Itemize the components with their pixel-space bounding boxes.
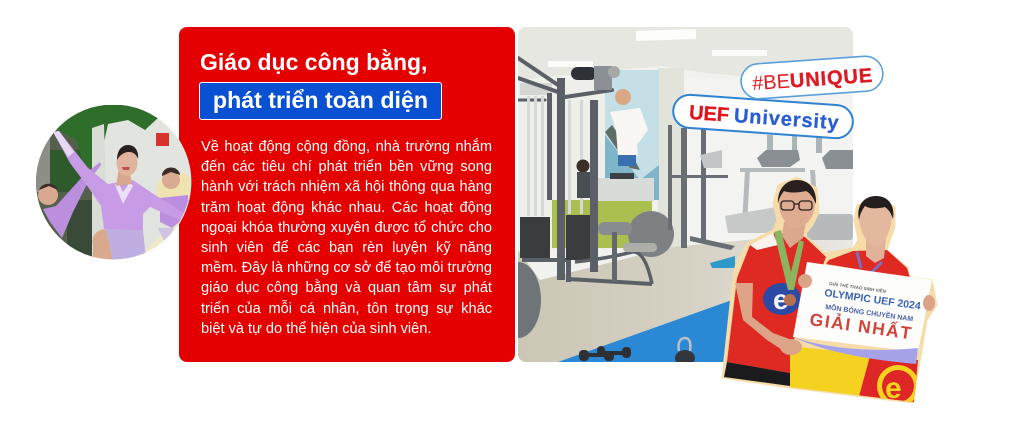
weight stacks: [520, 217, 550, 258]
green wall and reception desk: [552, 200, 652, 248]
left wall and columns: [518, 80, 608, 250]
ball left: [518, 262, 541, 338]
jersey logo: [763, 283, 801, 315]
badge: #BEUNIQUE pill: #BEUNIQUE: [752, 65, 874, 95]
text block: body paragraph: ngoại khóa thường xuyên được tổ chức cho: [201, 220, 492, 236]
medal ribbon and medal: [774, 230, 804, 290]
award sign board: MÔN BÓNG CHUYỀN NAM: [825, 301, 914, 323]
exercise ball rear: [628, 211, 674, 257]
right dancer: [162, 171, 180, 189]
mural with runner: [605, 70, 659, 178]
text block: body paragraph: sinh viên để các bạn rèn luyện kỹ năng: [201, 240, 492, 256]
panel: red text card: [179, 27, 515, 362]
person behind machine: [576, 160, 590, 172]
sticker: volleyball winners cut-out: e: [773, 284, 789, 315]
award sign board: GIẢI NHẤT: [808, 308, 914, 343]
text block: body paragraph: Về hoạt động cộng đồng, nhà trường nhắm: [201, 139, 492, 155]
award sign board: GIẢI THỂ THAO SINH VIÊN: [829, 279, 887, 294]
left player arm: [735, 283, 800, 355]
badge: UEF University pill: [672, 94, 854, 139]
ceiling: [518, 27, 853, 79]
right player neck: [866, 238, 886, 263]
black shorts: [724, 362, 790, 386]
badge: UEF University pill: UEFUniversity: [688, 102, 840, 134]
left player jersey: [727, 233, 826, 373]
text block: body paragraph: biệt và tự do thể hiện của sinh viên.: [201, 321, 431, 337]
right player ribbon: [857, 252, 882, 272]
yellow flag: e: [885, 372, 902, 405]
heading: blue highlighted line: [199, 82, 442, 120]
text block: body paragraph: hành với trách nhiệm xã hội thông qua hàng: [201, 179, 492, 195]
text block: body paragraph: giáo dục công bằng và quan tâm sự phát: [201, 280, 492, 296]
hands: [780, 339, 802, 355]
graphics layer: photos and badges: [36, 27, 938, 404]
text block: body paragraph: [201, 138, 492, 337]
photo: circular dancer portrait: [35, 105, 196, 261]
centre dancer: [92, 229, 116, 261]
neck: [782, 222, 806, 248]
sticker: volleyball winners cut-out: [722, 177, 937, 407]
right player head: [859, 198, 892, 246]
photo: gym interior: [495, 27, 853, 366]
sticker outline: [722, 177, 937, 403]
kettlebell: [675, 350, 695, 362]
text block: body paragraph: đến các tiêu chí phát triển bền vững song: [201, 159, 492, 175]
cable machine frame: [520, 83, 552, 95]
left dancer: [38, 185, 58, 205]
floor: [518, 230, 853, 362]
badge: #BEUNIQUE pill: [740, 55, 884, 100]
text block: body paragraph: mềm. Đây là những cơ sở để tạo môi trường: [201, 260, 492, 276]
award sign board: OLYMPIC UEF 2024: [824, 287, 922, 313]
leg-curl bench: [568, 222, 657, 284]
right player jersey: [826, 250, 910, 278]
heading: blue highlighted line: phát triển toàn diện: [213, 87, 428, 113]
text block: body paragraph: trăm hoạt động khác nhau. Các hoạt động: [201, 200, 492, 216]
decorative ring: white arc with faint shadow: [165, 124, 191, 240]
blue floor mat: [558, 300, 732, 362]
heading: line one: Giáo dục công bằng,: [200, 49, 427, 75]
yellow flag: [790, 347, 918, 402]
text block: body paragraph: triển của mỗi cá nhân, tôn trọng sự khác: [201, 300, 492, 316]
dumbbells: [579, 346, 631, 361]
shoulder patch: [750, 233, 778, 250]
award sign board: [793, 262, 932, 364]
machine pulleys: [571, 67, 594, 80]
right machine and treadmills: [668, 125, 735, 250]
left player head: [779, 184, 815, 228]
